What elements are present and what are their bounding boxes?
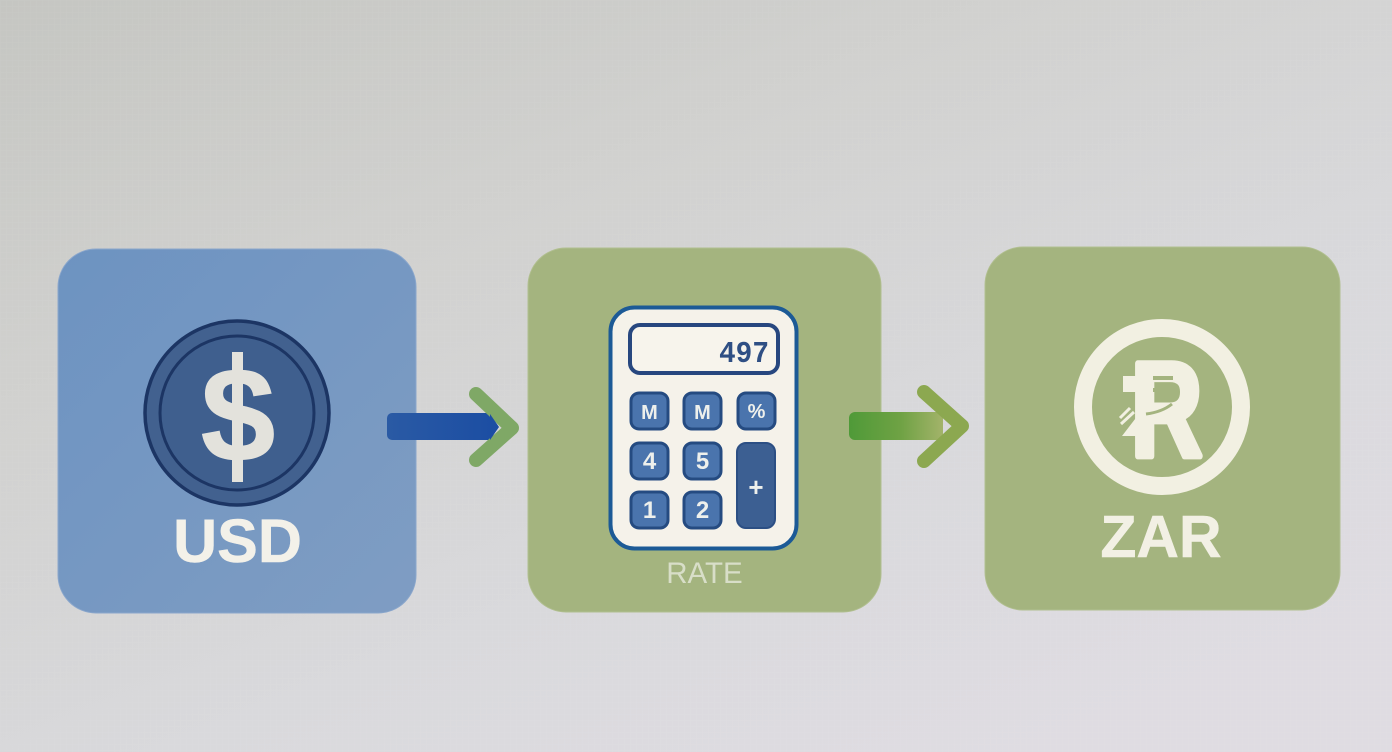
calculator keys: 5 [696,448,709,475]
icon: calculator [610,308,796,548]
arrow: rate to ZAR [849,392,962,461]
calculator keys: M [641,402,658,424]
label: RATE: RATE [666,557,743,590]
panel: USD [58,249,416,613]
calculator keys [631,393,775,528]
icon: dollar coin [145,321,329,505]
calculator keys: 2 [696,497,709,524]
calculator keys: M [694,402,711,424]
panel: rate [528,248,881,612]
calculator keys: + [748,472,764,502]
panel: ZAR [985,247,1340,610]
calculator display: 497 [719,337,769,372]
label: USD: USD [173,507,302,575]
icon: dollar coin: $ [201,341,275,490]
calculator keys: 4 [643,448,657,475]
rand symbol: R [1131,334,1202,484]
calculator keys: % [748,401,766,423]
label: ZAR: ZAR [1100,504,1222,570]
calculator display [630,325,778,373]
arrow: USD to rate [387,394,512,460]
calculator keys: 1 [643,497,656,524]
icon: rand coin [1083,328,1241,486]
